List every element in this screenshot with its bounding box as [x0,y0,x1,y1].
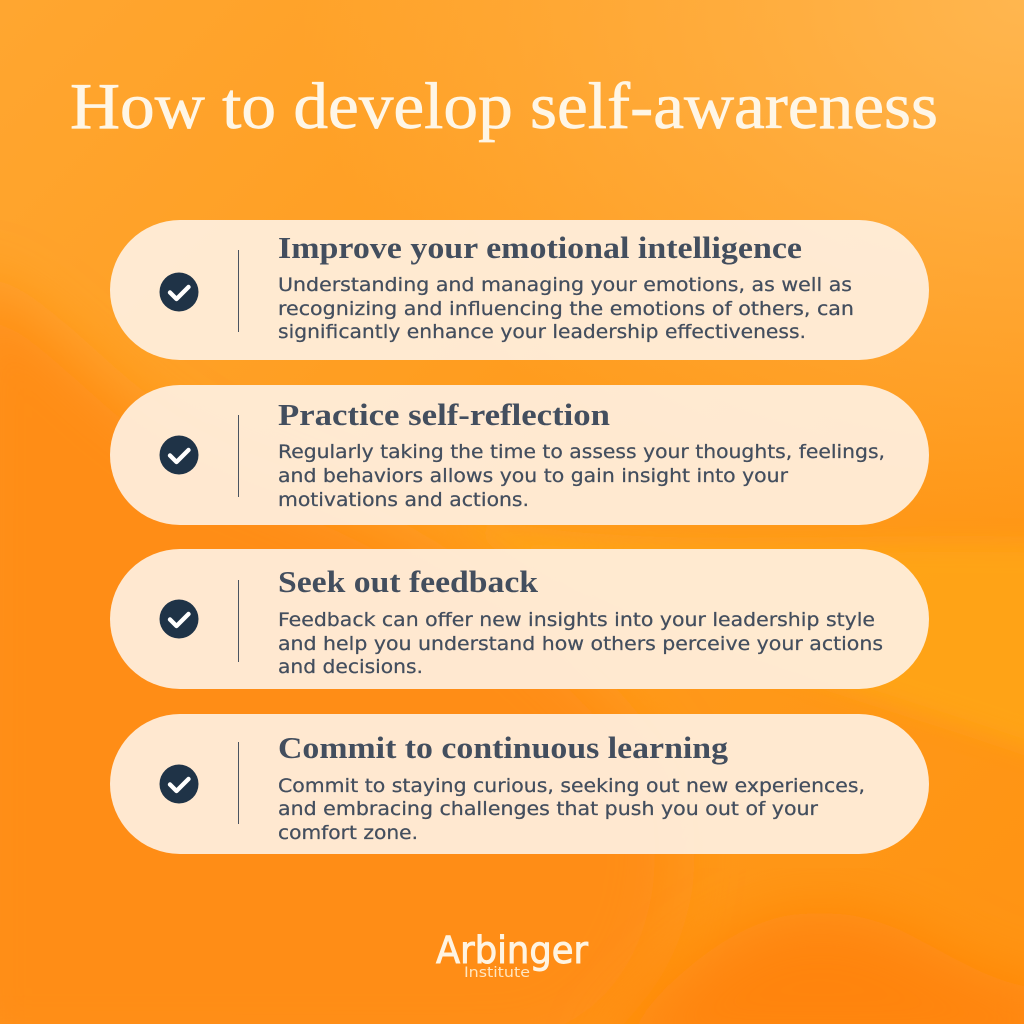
body text 2: and behaviors allows you to gain insight into your [278,465,788,487]
body text 2 [278,441,885,511]
heading 1: Improve your emotional intelligence [278,230,802,265]
body text 4: and embracing challenges that push you out of your [278,798,818,820]
heading 2: Practice self-reflection [278,397,610,432]
title: How to develop self-awareness [70,70,938,143]
card 3: feedback [110,549,929,689]
heading 3: Seek out feedback [278,564,539,599]
icon: check badge 3 [160,600,198,638]
body text 1 [278,274,854,343]
icon: check badge 1 [160,272,198,312]
body text 4: Commit to staying curious, seeking out new experiences, [278,775,865,797]
body text 1: recognizing and influencing the emotions of others, can [278,298,854,320]
body text 1: significantly enhance your leadership effectiveness. [278,321,806,343]
logo: Arbinger Institute: Institute [464,965,530,981]
card 2: self-reflection [110,385,929,525]
icon: check badge 4 [160,764,198,804]
body text 4 [278,775,865,844]
logo: Arbinger Institute: Arbinger [436,929,589,972]
body text 2: Regularly taking the time to assess your thoughts, feelings, [278,441,885,463]
body text 1: Understanding and managing your emotions, as well as [278,274,852,296]
body text 3: and decisions. [278,656,423,678]
heading 4: Commit to continuous learning [278,730,729,765]
body text 4: comfort zone. [278,822,418,844]
card 4: continuous learning [110,714,929,854]
body text 3 [278,609,883,678]
body text 3: and help you understand how others perceive your actions [278,633,883,655]
card 1: emotional intelligence [110,220,929,360]
icon: check badge 2 [160,436,198,474]
body text 3: Feedback can offer new insights into your leadership style [278,609,875,631]
body text 2: motivations and actions. [278,489,529,511]
